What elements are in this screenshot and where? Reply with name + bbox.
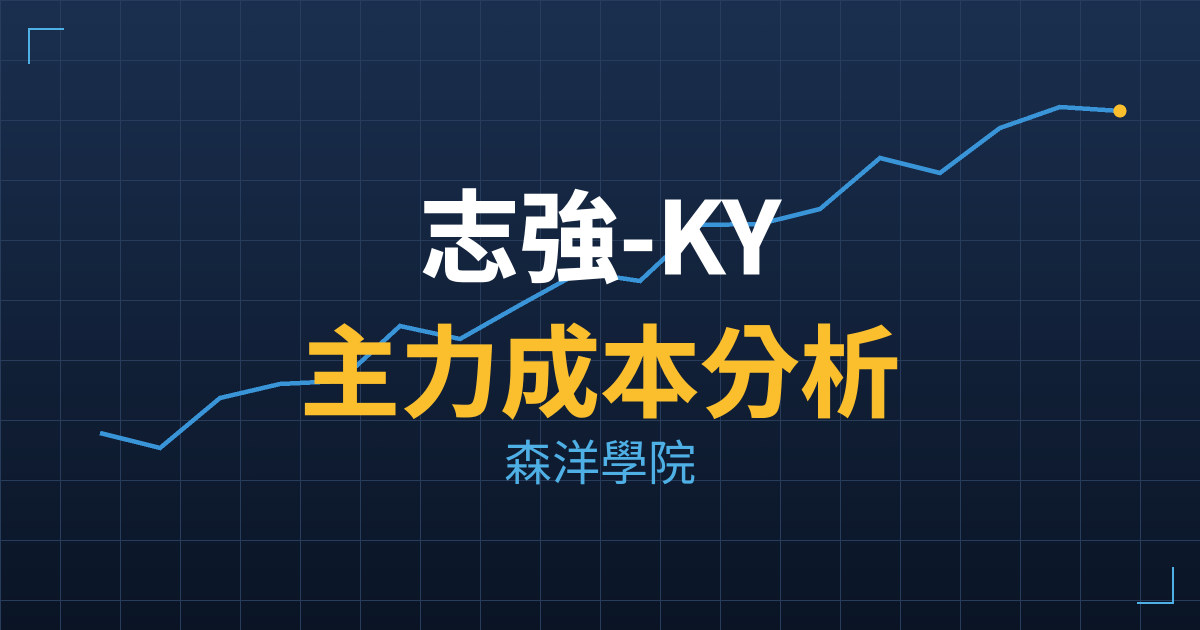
subtitle: 主力成本分析 <box>300 293 900 438</box>
corner bracket: bottom right <box>1137 567 1173 603</box>
brand name: 森洋學院 <box>504 424 696 494</box>
corner bracket: top left <box>29 29 64 64</box>
title: 志強-KY <box>420 158 780 303</box>
icon: end point marker <box>1114 104 1126 118</box>
line chart: rising price line <box>100 107 1120 448</box>
